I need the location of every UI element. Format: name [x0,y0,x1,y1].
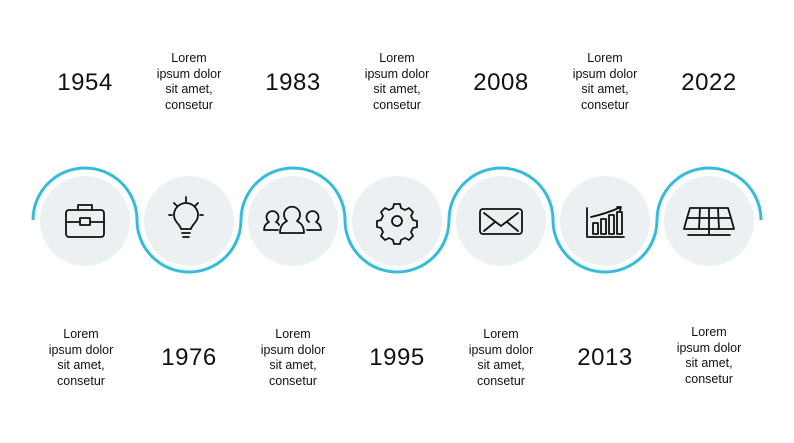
text: Lorem [483,327,519,341]
text: consetur [373,98,421,112]
icon: envelope [480,209,522,234]
text top: consetur [165,98,213,112]
text: 1995 [369,344,425,371]
icon: gear [377,204,417,244]
text: consetur [581,98,629,112]
text: Lorem [379,51,415,65]
text: sit amet, [477,358,525,372]
text: consetur [685,372,733,386]
text bottom: consetur [57,374,105,388]
text: Lorem [691,325,727,339]
icon: solar panel [684,208,734,235]
text: Lorem [275,327,311,341]
text: 2022 [681,69,737,96]
icon: briefcase [66,205,104,237]
wave line [33,168,761,272]
text bottom [49,327,114,388]
text: ipsum dolor [469,342,533,356]
text: sit amet, [373,82,421,96]
text: 2013 [577,344,633,371]
years top: 1954 [57,69,113,96]
years bottom: 1976 [161,344,217,371]
text bottom: ipsum dolor [49,342,113,356]
text top: ipsum dolor [157,66,221,80]
text: ipsum dolor [677,340,741,354]
text top: sit amet, [165,82,213,96]
text: 1983 [265,69,321,96]
text: ipsum dolor [573,66,637,80]
text top: Lorem [171,51,207,65]
text: sit amet, [685,356,733,370]
text bottom: sit amet, [57,358,105,372]
circles [40,176,754,266]
text: ipsum dolor [261,342,325,356]
icon: people [264,207,321,233]
text: Lorem [587,51,623,65]
text: consetur [269,374,317,388]
text: sit amet, [581,82,629,96]
text: 2008 [473,69,529,96]
text top [157,51,222,112]
text: sit amet, [269,358,317,372]
icon: chart [587,207,624,237]
text bottom: Lorem [63,327,99,341]
text: ipsum dolor [365,66,429,80]
icon: lightbulb [169,197,203,237]
text: consetur [477,374,525,388]
